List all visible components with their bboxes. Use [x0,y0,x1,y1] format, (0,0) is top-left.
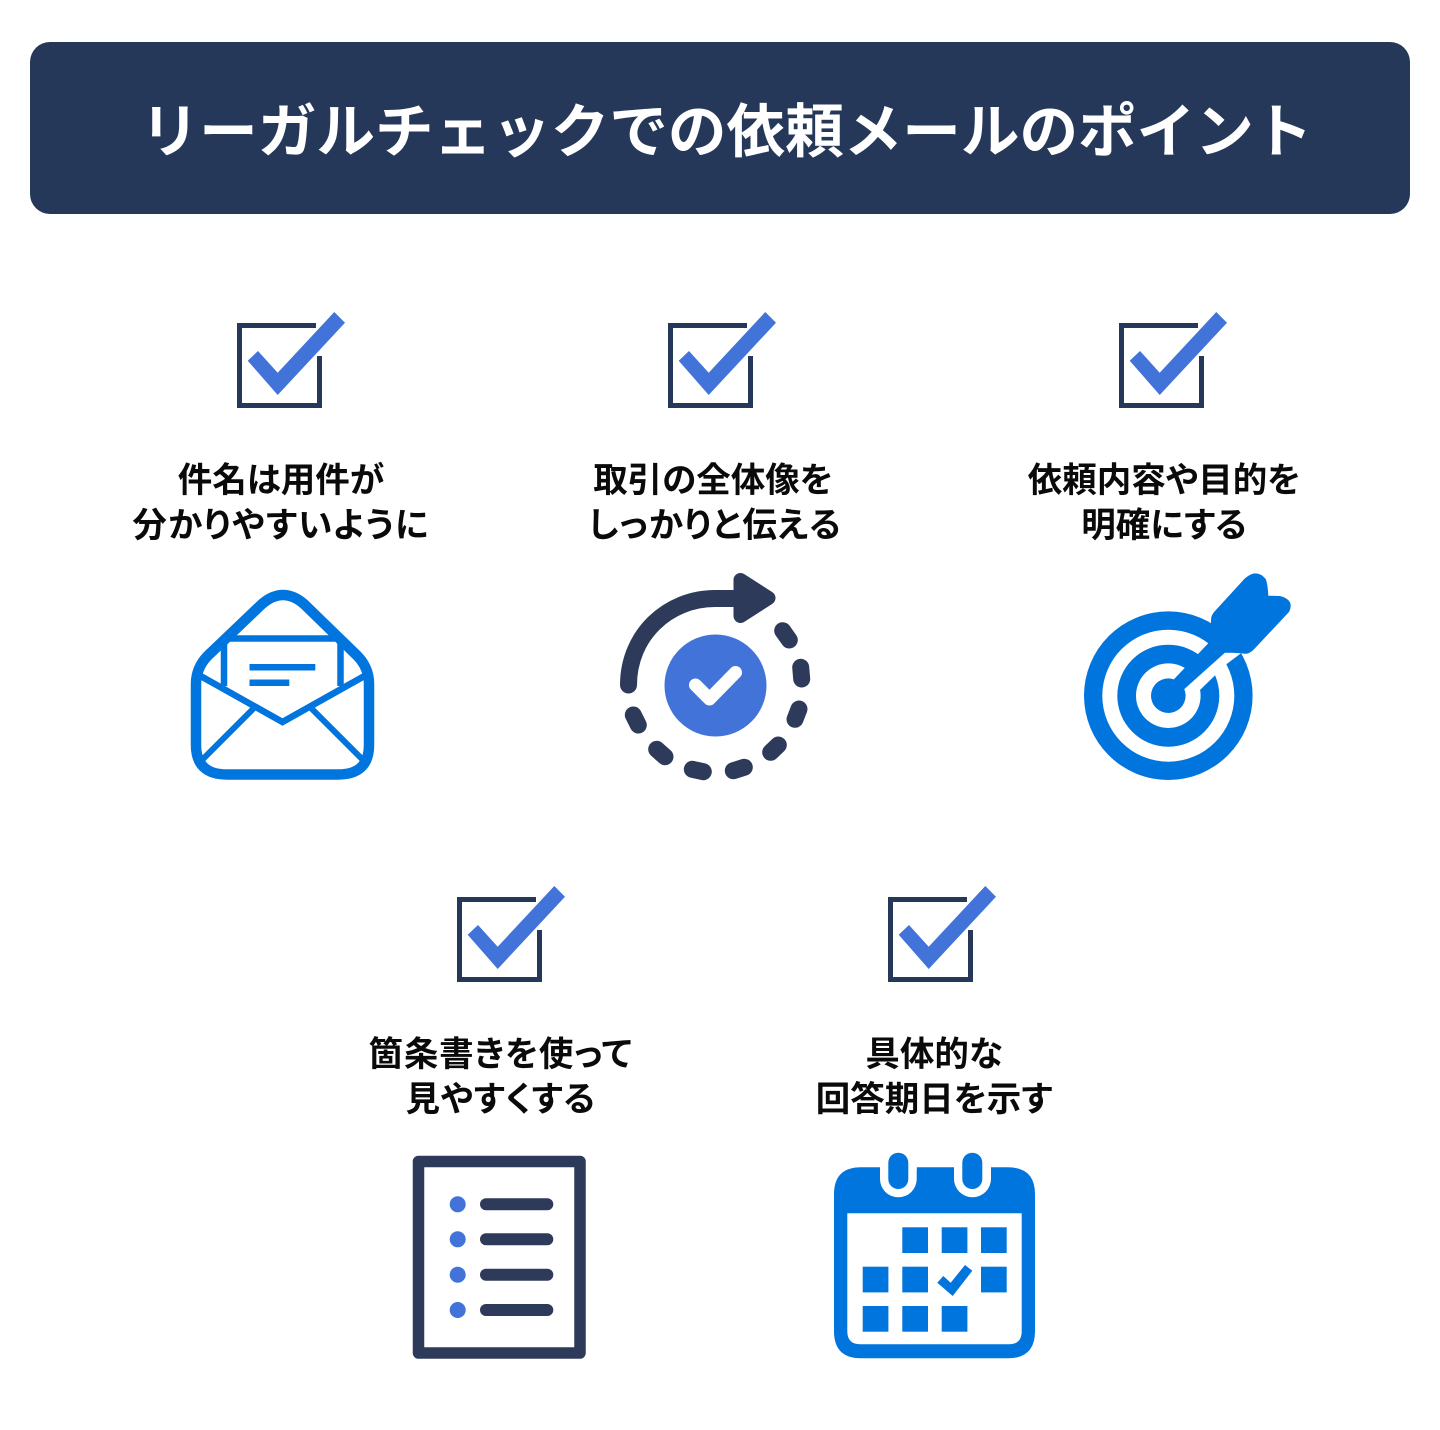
panel: subject line [132,312,430,774]
icon: checkbox 1 [240,312,345,406]
label: clarify content and purpose [1028,462,1300,545]
panel: content and goal [1028,312,1300,780]
label: use bullet points: 見やすくする [405,1081,596,1119]
label: give a concrete due date: 具体的な [865,1036,1003,1074]
label: clarify content and purpose: 明確にする [1081,507,1247,545]
label: give a concrete due date: 回答期日を示す [816,1081,1053,1119]
icon: open envelope [196,595,369,774]
label: convey the background: 取引の全体像を [593,462,833,500]
label: subject line: 分かりやすいように [132,507,430,545]
label: clarify content and purpose: 依頼内容や目的を [1028,462,1300,500]
label: convey the background [588,462,842,545]
panel: bullet points [369,886,632,1353]
title banner: リーガルチェックでの依頼メールのポイント [141,100,1312,165]
label: use bullet points [369,1036,632,1119]
label: give a concrete due date [816,1036,1053,1119]
icon: checkbox 5 [890,886,996,980]
icon: checkbox 3 [1122,312,1227,406]
title banner [30,42,1410,214]
icon: checkbox 4 [460,886,565,980]
panel: purpose of request [588,312,842,772]
icon: checkbox 2 [670,312,776,406]
panel: deadline [816,886,1053,1358]
icon: calendar [834,1150,1035,1358]
icon: target with arrow [1084,573,1291,780]
label: convey the background: しっかりと伝える [588,507,842,545]
label: subject line [132,461,430,545]
icon: circular arrow with check [628,580,802,772]
label: subject line: 件名は用件が [178,461,384,500]
label: use bullet points: 箇条書きを使って [369,1036,632,1074]
icon: bulleted document [418,1162,580,1353]
